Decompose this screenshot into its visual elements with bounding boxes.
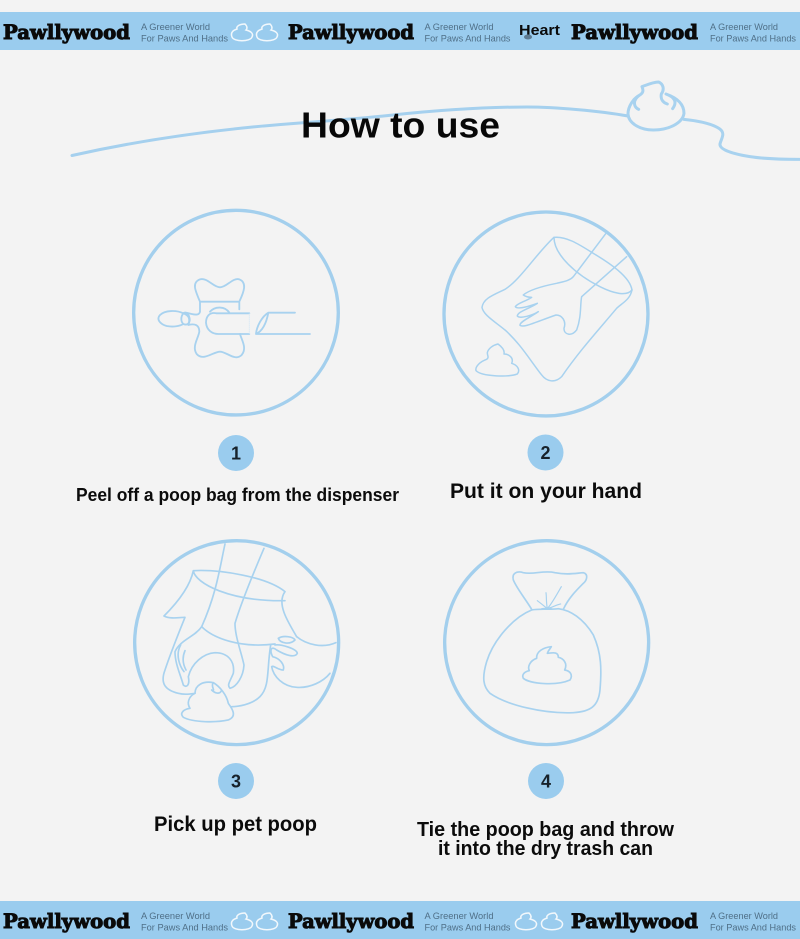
icon: dispenser and bag <box>134 210 338 415</box>
caption: Put it on your hand <box>450 480 642 503</box>
title: How to use <box>301 105 500 146</box>
panel: step 1 peel off bag <box>76 210 399 505</box>
caption <box>417 819 674 860</box>
caption: Tie the poop bag and throw <box>417 819 674 841</box>
top brand banner: For Paws And Hands <box>424 34 511 44</box>
bottom brand banner: A Greener World <box>710 911 778 922</box>
top brand banner: For Paws And Hands <box>141 34 228 44</box>
panel: step 4 tie the bag <box>417 541 674 860</box>
caption: it into the dry trash can <box>438 838 653 860</box>
top brand banner: A Greener World <box>710 22 778 33</box>
top brand banner: Pawllywood <box>571 20 698 44</box>
number badge <box>218 763 254 799</box>
caption: Pick up pet poop <box>154 813 317 836</box>
number badge <box>528 763 564 799</box>
panel: step 3 pick up poop <box>135 541 339 836</box>
top brand banner: A Greener World <box>424 22 494 33</box>
top brand banner: A Greener World <box>141 22 210 33</box>
bottom brand banner: Pawllywood <box>571 909 698 933</box>
top brand banner: Pawllywood <box>288 20 414 44</box>
bottom brand banner: For Paws And Hands <box>710 922 796 934</box>
bottom brand banner: A Greener World <box>141 911 210 922</box>
icon: hand picking up poop <box>135 541 339 745</box>
caption: Peel off a poop bag from the dispenser <box>76 485 399 505</box>
number badge: 1 <box>231 444 241 464</box>
bottom brand banner: A Greener World <box>424 911 494 922</box>
top brand banner: Heart <box>519 22 560 39</box>
bottom brand banner: Pawllywood <box>288 909 414 933</box>
number badge: 3 <box>231 772 241 792</box>
number badge: 4 <box>541 772 551 792</box>
panel: step 2 put on hand <box>444 212 648 503</box>
number badge <box>218 435 254 471</box>
icon: gloved hand in bag <box>444 212 648 416</box>
bottom brand banner: For Paws And Hands <box>424 922 511 934</box>
bottom brand banner <box>0 901 800 939</box>
number badge <box>528 434 564 470</box>
top brand banner: Pawllywood <box>3 20 130 44</box>
icon: tied bag <box>445 541 649 745</box>
decorative line with poop icon <box>72 82 800 159</box>
top brand banner <box>0 12 800 50</box>
top brand banner: For Paws And Hands <box>710 34 796 44</box>
bottom brand banner: Pawllywood <box>3 909 130 933</box>
number badge: 2 <box>540 443 551 463</box>
bottom brand banner: For Paws And Hands <box>141 922 228 934</box>
